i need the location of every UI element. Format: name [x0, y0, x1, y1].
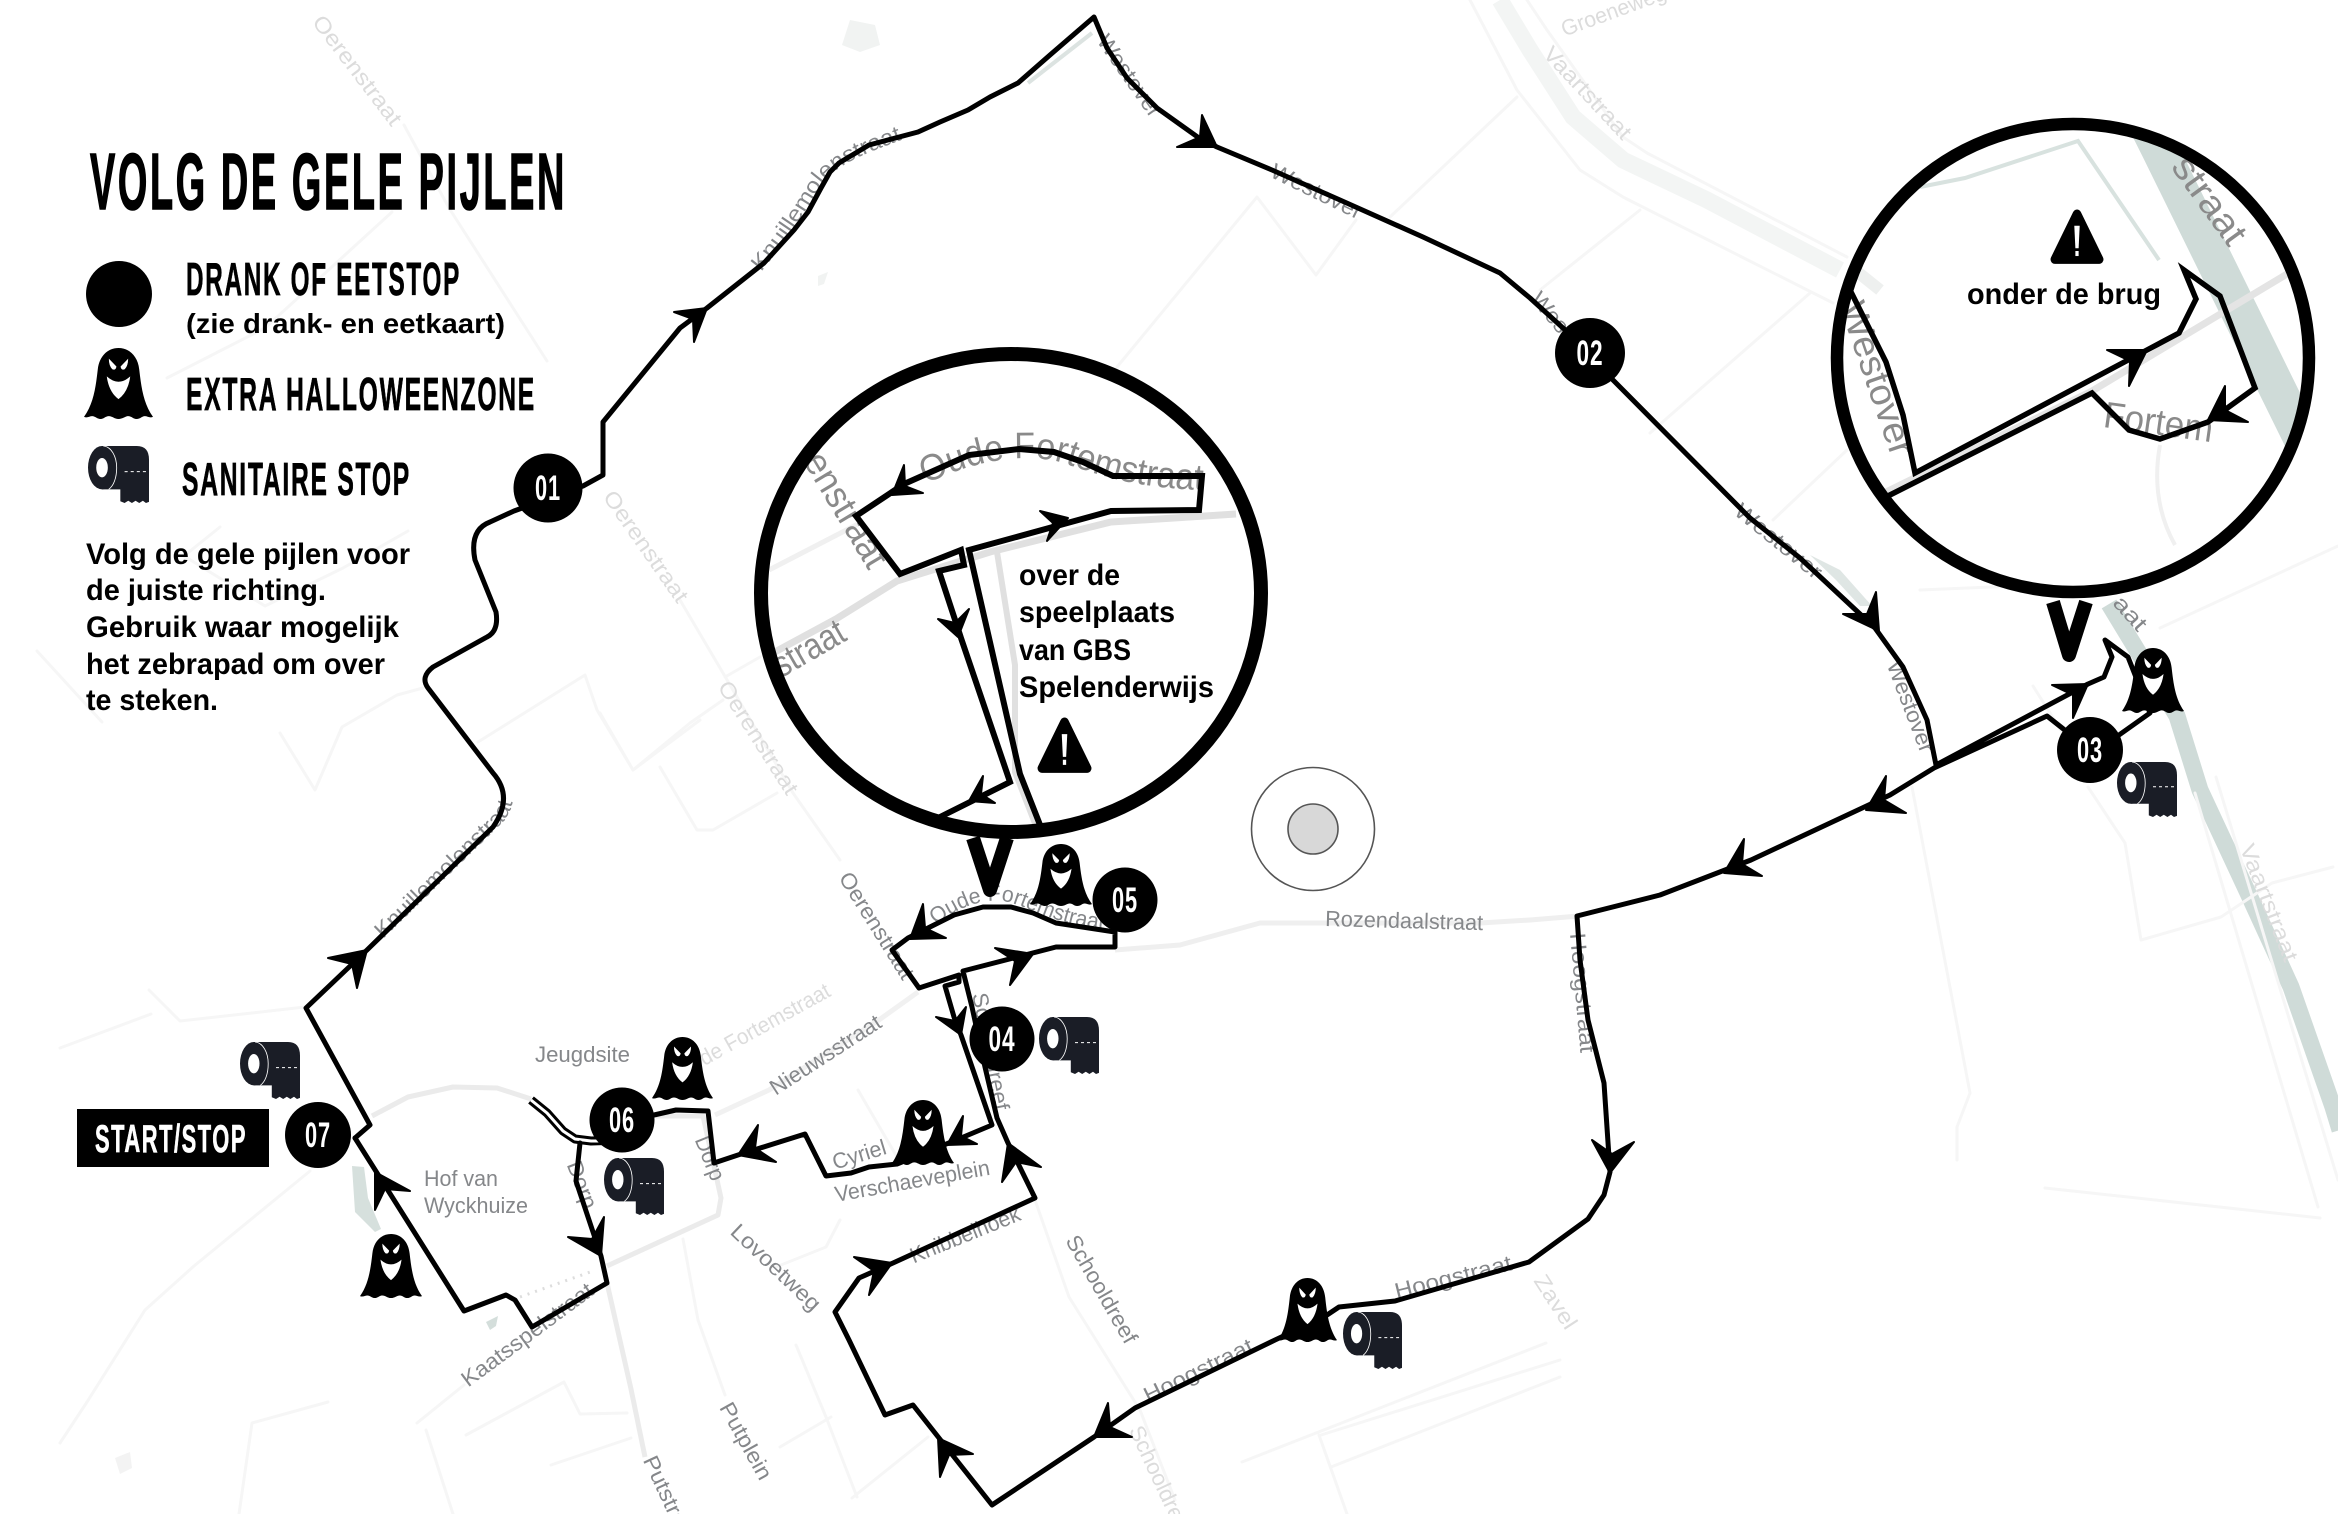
instructions text — [86, 538, 410, 717]
stop marker 05 — [1092, 868, 1158, 932]
street labels: Schooldreef — [1061, 1230, 1143, 1349]
street labels: Dorp — [690, 1132, 730, 1184]
street labels: Oerenstraat — [713, 676, 804, 799]
street labels: Hoogstraat — [1139, 1333, 1257, 1408]
street labels: Wes — [1526, 287, 1575, 338]
callout: speelplaats GBS Spelenderwijs: speelplaats — [1019, 596, 1175, 629]
legend: sanitary stop: SANITAIRE STOP — [182, 453, 411, 505]
street labels: Wyckhuize — [424, 1193, 528, 1218]
street labels: Oerenstraat — [598, 486, 694, 607]
legend: drink or food stop: DRANK OF EETSTOP — [186, 253, 461, 305]
callout: onder de brug: straat — [2164, 148, 2256, 253]
start/stop label: START/STOP — [95, 1118, 247, 1161]
street labels: Schooldreef — [967, 991, 1015, 1113]
legend: sanitary stop — [88, 446, 411, 505]
stop marker 06: 06 — [609, 1101, 635, 1140]
callout: speelplaats GBS Spelenderwijs — [754, 347, 1268, 897]
stop marker 06 — [590, 1088, 654, 1152]
stop marker 04: 04 — [988, 1020, 1016, 1059]
stop marker 02 — [1555, 318, 1625, 388]
callout: speelplaats GBS Spelenderwijs: Spelenderwijs — [1019, 671, 1214, 704]
stop marker 04 — [970, 1006, 1034, 1072]
instructions text: het zebrapad om over — [86, 648, 385, 681]
callout: speelplaats GBS Spelenderwijs: over de — [1019, 559, 1120, 592]
callout: onder de brug: Westover — [1832, 296, 1923, 461]
street labels: Kaatsspelstraat — [456, 1278, 598, 1392]
street labels: Hoogstraat — [1565, 932, 1600, 1054]
street labels: Rozendaalstraat — [1325, 906, 1483, 935]
start/stop label — [77, 1109, 269, 1167]
street labels: Nieuwsstraat — [765, 1009, 886, 1100]
legend: extra halloween zone — [84, 348, 536, 420]
stop marker 07: 07 — [305, 1116, 331, 1155]
stop marker 03 — [2057, 717, 2123, 783]
street labels: aat — [2108, 590, 2153, 636]
callout: onder de brug: Fortem — [2101, 394, 2216, 450]
callout: speelplaats GBS Spelenderwijs: enstraat — [796, 444, 897, 576]
street labels: Oerenstraat — [307, 10, 407, 130]
street labels: Vaartstraat — [2235, 840, 2303, 965]
stop marker 07 — [285, 1102, 351, 1168]
stop marker 01: 01 — [535, 469, 561, 508]
street labels: Cyriel — [829, 1134, 889, 1174]
direction arrows — [328, 115, 2088, 1477]
ghost icons: halloween zones — [360, 648, 2184, 1342]
instructions text: de juiste richting. — [86, 574, 326, 607]
instructions text: Volg de gele pijlen voor — [86, 538, 410, 571]
stop marker 05: 05 — [1112, 881, 1138, 920]
legend — [84, 253, 536, 505]
stop marker 02: 02 — [1576, 334, 1604, 373]
street labels: Putplein — [715, 1398, 778, 1484]
route line — [306, 17, 2150, 1505]
callout: speelplaats GBS Spelenderwijs: Oude Fortemstraat — [920, 432, 1204, 490]
street labels: Oude Fortemstraat — [930, 885, 1104, 928]
street labels: Westover — [1092, 30, 1167, 122]
street labels: Zavel — [1529, 1270, 1583, 1334]
street labels: Oerenstraat — [834, 867, 920, 984]
street labels: de Fortemstraat — [695, 978, 835, 1070]
legend: drink or food stop — [86, 253, 505, 339]
street labels: Jeugdsite — [535, 1042, 630, 1067]
street labels: Verschaeveplein — [833, 1155, 992, 1207]
street labels: Knuillemolenstraat — [750, 127, 902, 270]
instructions text: te steken. — [86, 684, 218, 717]
street labels: Westover — [1267, 158, 1367, 224]
route map infographic: VOLG DE GELE PIJLEN — [90, 137, 567, 226]
callout: onder de brug: onder de brug — [1967, 278, 2161, 311]
toilet roll icons: sanitary stops — [240, 762, 2177, 1369]
street labels: Westover — [1729, 498, 1828, 584]
instructions text: Gebruik waar mogelijk — [86, 611, 399, 644]
street labels: Vaartstraat — [1538, 41, 1637, 144]
icon: roundabout — [1252, 768, 1374, 890]
callout: onder de brug — [1832, 110, 2310, 655]
street labels: Dorp — [562, 1157, 603, 1212]
legend: drink or food stop: (zie drank- en eetkaart) — [186, 308, 505, 339]
street labels: Knuillemolenstraat — [374, 800, 513, 938]
street labels: Hof van — [424, 1166, 498, 1191]
street labels: Lovoetweg — [726, 1219, 826, 1316]
callout: speelplaats GBS Spelenderwijs: straat — [764, 611, 853, 685]
callout: speelplaats GBS Spelenderwijs: van GBS — [1019, 634, 1131, 667]
legend: extra halloween zone: EXTRA HALLOWEENZONE — [186, 368, 536, 420]
street labels: Westover — [1882, 657, 1940, 756]
street labels: Knibbelhoek — [906, 1201, 1025, 1268]
stop marker 03: 03 — [2077, 731, 2103, 770]
stop marker 01 — [514, 454, 582, 522]
street labels: Hoogstraat — [1392, 1250, 1514, 1304]
